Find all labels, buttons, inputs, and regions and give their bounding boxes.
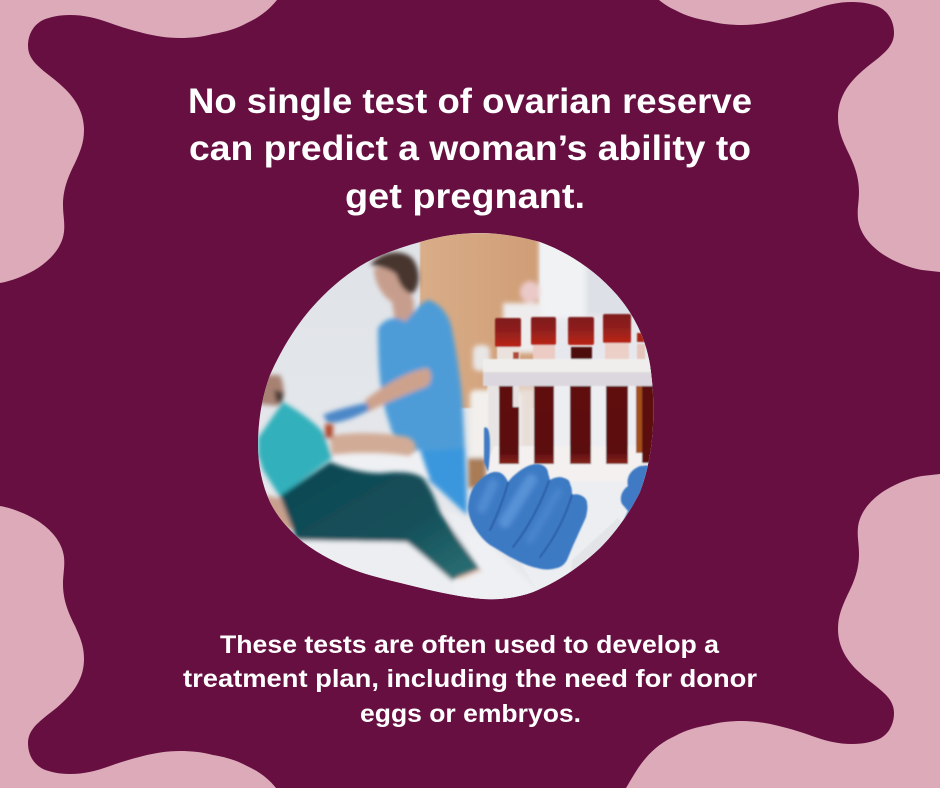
tube 2 bbox=[531, 317, 556, 464]
title: get pregnant. bbox=[345, 177, 585, 216]
nurse gloved hand bbox=[323, 403, 369, 423]
body text: These tests are often used to develop a bbox=[220, 631, 720, 659]
finger highlights bbox=[482, 480, 558, 540]
patient bbox=[258, 375, 540, 600]
space behind rack bbox=[487, 386, 652, 448]
bottom left corner bbox=[0, 506, 276, 788]
photo: blood test tubes held in front of nurse and patient bbox=[258, 233, 654, 600]
test tube rack bbox=[483, 314, 654, 482]
title: No single test of ovarian reserve bbox=[188, 82, 752, 121]
rack bottom bbox=[487, 446, 650, 482]
body text: eggs or embryos. bbox=[360, 700, 581, 728]
tube 3 bbox=[568, 317, 594, 464]
nurse bbox=[323, 252, 467, 515]
patient shirt bbox=[258, 402, 332, 497]
nurse scrubs bbox=[378, 300, 467, 515]
photo background wall bbox=[258, 233, 654, 600]
rack top bar bbox=[483, 359, 653, 386]
foot bbox=[453, 566, 482, 580]
top left corner bbox=[0, 0, 277, 283]
white lab background bbox=[468, 233, 653, 488]
patient pants bbox=[280, 462, 480, 581]
patient arm bbox=[330, 433, 416, 456]
bottom right corner bbox=[626, 474, 940, 788]
body text bbox=[183, 631, 757, 728]
finger creases bbox=[490, 481, 572, 557]
tube 4 bbox=[603, 314, 631, 464]
nurse neck and face bbox=[374, 265, 414, 322]
nurse arm bbox=[365, 368, 431, 412]
sterile white sleeve bbox=[538, 506, 632, 590]
gloved hand bbox=[468, 427, 652, 570]
small glove behind rack bbox=[484, 427, 490, 472]
title: can predict a woman’s ability to bbox=[189, 129, 751, 168]
tube 5 bbox=[636, 333, 654, 463]
nurse hair bbox=[370, 252, 419, 294]
title bbox=[188, 82, 752, 216]
body text: treatment plan, including the need for donor bbox=[183, 665, 757, 693]
white sheet lower right bbox=[452, 558, 538, 600]
white sheet bbox=[295, 540, 540, 600]
tube 1 bbox=[495, 318, 521, 464]
right glove fragment bbox=[620, 464, 648, 521]
bed blanket bbox=[330, 448, 430, 480]
patient skin lower left bbox=[262, 495, 296, 530]
top right corner bbox=[659, 0, 940, 272]
wood panel bbox=[420, 233, 540, 408]
hand outline bbox=[468, 464, 587, 570]
rack upright bbox=[488, 386, 498, 464]
